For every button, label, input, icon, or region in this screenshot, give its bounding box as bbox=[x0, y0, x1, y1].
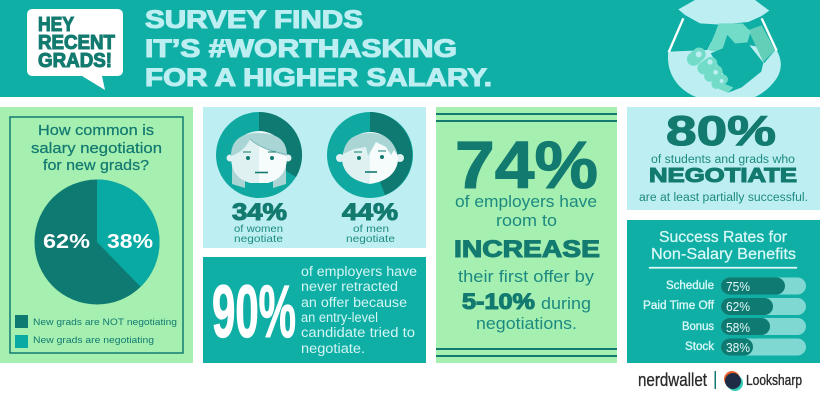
speech bubble: hey recent grads: RECENT bbox=[38, 32, 115, 54]
header banner bbox=[0, 0, 820, 97]
body text: are at least partially successful. bbox=[639, 192, 808, 204]
bar chart: Schedule bbox=[666, 280, 714, 292]
bar chart: 58% bbox=[726, 320, 750, 335]
bar chart bbox=[643, 278, 806, 356]
stat: 44% of men bbox=[342, 199, 398, 245]
stat: 34% of women: of women bbox=[234, 223, 283, 235]
headline: IT’S #WORTHASKING bbox=[145, 35, 457, 63]
pie chart bbox=[34, 180, 160, 304]
body text: of students and grads who bbox=[651, 154, 795, 166]
body text: INCREASE bbox=[454, 236, 600, 263]
body text: of employers have bbox=[455, 193, 597, 211]
big number 74%: 74% bbox=[455, 128, 598, 203]
body text: of employers have bbox=[301, 264, 417, 279]
panel heading: Non-Salary Benefits bbox=[651, 246, 796, 263]
body text: room to bbox=[496, 212, 557, 230]
panel heading: Success Rates for bbox=[659, 229, 787, 246]
footer logos: Looksharp bbox=[746, 373, 802, 389]
panel heading bbox=[649, 229, 797, 268]
stat: 34% of women: negotiate bbox=[234, 233, 283, 245]
body text: candidate tried to bbox=[301, 325, 415, 340]
body text: never retracted bbox=[301, 279, 398, 294]
panel heading: How common is bbox=[38, 122, 154, 139]
bar chart: 75% bbox=[726, 279, 750, 294]
footer logos bbox=[638, 370, 802, 391]
panel heading: salary negotiation bbox=[31, 140, 162, 157]
footer logos: nerdwallet bbox=[638, 370, 707, 390]
bar chart: Stock bbox=[685, 341, 714, 353]
bar chart: Bonus bbox=[682, 321, 714, 333]
body text: negotiations. bbox=[476, 315, 577, 333]
big number 90%: 90% bbox=[212, 270, 296, 353]
speech bubble: hey recent grads: GRADS! bbox=[38, 50, 112, 72]
icon: man face donut bbox=[327, 112, 413, 198]
body text: NEGOTIATE bbox=[649, 165, 797, 187]
panel: how common is negotiation bbox=[0, 107, 193, 363]
panel: women and men bbox=[203, 107, 426, 248]
headline: FOR A HIGHER SALARY. bbox=[145, 64, 492, 92]
big number 80%: 80% bbox=[666, 107, 776, 154]
panel: 80% negotiate bbox=[627, 107, 820, 210]
panel heading bbox=[31, 122, 162, 174]
icon: handshake in globe bbox=[668, 0, 781, 97]
panel: 74% of employers bbox=[436, 107, 617, 363]
body text: negotiate. bbox=[301, 341, 365, 356]
stat: 34% of women: 34% bbox=[232, 199, 287, 226]
body text bbox=[301, 264, 417, 356]
body text: an entry-level bbox=[301, 310, 378, 325]
bar chart: 62% bbox=[726, 299, 750, 314]
speech bubble: hey recent grads: HEY bbox=[38, 14, 75, 36]
panel: success rates bbox=[627, 220, 820, 363]
pie chart: 38% bbox=[107, 231, 153, 253]
legend: New grads are NOT negotiating bbox=[33, 317, 177, 328]
speech bubble: hey recent grads bbox=[27, 9, 123, 90]
stat: 44% of men: of men bbox=[353, 223, 389, 235]
body text: during bbox=[541, 295, 591, 313]
panel: 90% of employers bbox=[203, 257, 426, 363]
body text bbox=[454, 193, 600, 333]
stat: 44% of men: negotiate bbox=[346, 233, 395, 245]
stat: 44% of men: 44% bbox=[342, 199, 398, 226]
body text: 5-10% bbox=[462, 289, 535, 314]
legend: New grads are negotiating bbox=[33, 335, 154, 346]
pie chart: 62% bbox=[43, 231, 90, 253]
stat: 34% of women bbox=[232, 199, 287, 245]
bar chart: Paid Time Off bbox=[643, 300, 715, 312]
body text: an offer because bbox=[301, 295, 407, 310]
headline bbox=[145, 6, 492, 92]
bar chart: 38% bbox=[726, 340, 750, 355]
icon: woman face donut bbox=[216, 112, 302, 198]
panel heading: for new grads? bbox=[43, 157, 149, 174]
headline: SURVEY FINDS bbox=[145, 6, 363, 34]
legend bbox=[15, 315, 177, 348]
body text: their first offer by bbox=[458, 268, 595, 286]
body text bbox=[639, 154, 808, 204]
